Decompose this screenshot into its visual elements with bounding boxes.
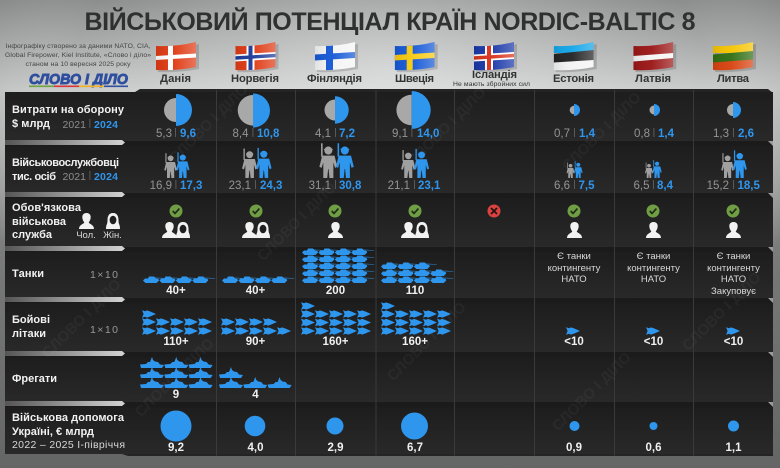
aid values: 6,7 — [407, 442, 423, 454]
row label: 2021 — [62, 119, 86, 131]
row label: 1×10 — [90, 269, 118, 281]
values: 2,6 — [738, 128, 754, 140]
row label — [12, 314, 118, 340]
country names: Латвія — [635, 73, 671, 85]
values: 23,1 — [229, 180, 251, 192]
watermarks — [39, 81, 765, 435]
tank notes: НАТО — [641, 274, 666, 285]
values: 0,7 — [554, 128, 570, 140]
watermarks: СЛОВО І ДІЛО — [549, 349, 635, 435]
aircraft values: 160+ — [323, 336, 349, 348]
country names: Швеція — [395, 73, 434, 85]
values: 8,4 — [232, 128, 249, 140]
values: 6,5 — [634, 180, 650, 192]
row: frigates — [12, 357, 292, 401]
values: 1,4 — [658, 128, 675, 140]
legend: men and women: Жін. — [103, 230, 122, 241]
row label: 2024 — [94, 171, 118, 183]
country names: Литва — [717, 73, 750, 85]
watermarks: СЛОВО І ДІЛО — [404, 84, 490, 170]
tank notes — [548, 251, 760, 297]
values: 9,6 — [180, 128, 196, 140]
row label: тис. осіб — [12, 171, 56, 183]
watermarks: СЛОВО І ДІЛО — [679, 269, 765, 355]
row: combat aircraft — [12, 302, 743, 348]
country names: Естонія — [553, 73, 594, 85]
row label: літаки — [12, 328, 46, 340]
values: 1,3 — [713, 128, 729, 140]
tank values: 200 — [326, 285, 345, 297]
values — [150, 180, 760, 192]
tank values — [166, 285, 424, 297]
row label: Фрегати — [12, 373, 57, 385]
row label: Обов'язкова — [12, 202, 82, 214]
row: tanks — [12, 248, 760, 297]
country names: Норвегія — [231, 73, 279, 85]
values: 4,1 — [315, 128, 331, 140]
row label: Військовослужбовці — [12, 157, 119, 169]
values: 5,3 — [156, 128, 172, 140]
values: 23,1 — [418, 180, 441, 192]
country names — [160, 69, 750, 88]
tank notes: Закуповує — [711, 286, 756, 297]
row label: 1×10 — [90, 324, 118, 336]
country names: Фінляндія — [307, 73, 362, 85]
tank notes: Є танки — [717, 251, 750, 262]
tank values: 110 — [406, 285, 424, 297]
row label: військова — [12, 216, 67, 228]
values: 10,8 — [257, 128, 280, 140]
aircraft values: 160+ — [402, 336, 428, 348]
source note: станом на 10 вересня 2025 року — [26, 61, 131, 68]
values: 6,6 — [554, 180, 570, 192]
values: 24,3 — [260, 180, 282, 192]
watermarks: СЛОВО І ДІЛО — [559, 89, 645, 175]
row label: $ млрд — [12, 118, 50, 130]
values: 14,0 — [417, 128, 439, 140]
row label: Бойові — [12, 314, 50, 326]
tank notes: Є танки — [637, 251, 670, 262]
flag: Latvia — [633, 41, 676, 72]
tank notes: контингенту — [548, 263, 601, 274]
flag: Denmark — [156, 41, 199, 72]
tank icons — [143, 248, 453, 283]
watermarks: СЛОВО І ДІЛО — [384, 299, 470, 385]
frigate values — [173, 389, 259, 401]
frigate values: 4 — [252, 389, 259, 401]
values — [156, 128, 754, 140]
row: conscription — [12, 202, 741, 241]
aircraft values: 110+ — [163, 336, 189, 348]
aid circles — [160, 410, 739, 442]
watermarks: СЛОВО І ДІЛО — [254, 179, 340, 265]
values: 1,4 — [579, 128, 596, 140]
row label: 2024 — [94, 119, 118, 131]
source note: Інфографіку створено за даними NATO, CIA, — [6, 42, 151, 50]
country names: Не мають збройних сил — [453, 80, 530, 88]
values: 15,2 — [707, 180, 729, 192]
frigate icons — [140, 357, 292, 388]
legend: men and women — [76, 213, 122, 241]
flag: Sweden — [395, 41, 438, 72]
row: personnel — [12, 143, 760, 192]
soldiers — [164, 143, 747, 178]
values: 30,8 — [339, 180, 362, 192]
tank notes: Є танки — [557, 251, 591, 262]
title: ВІЙСЬКОВИЙ ПОТЕНЦІАЛ КРАЇН NORDIC-BALTIC 8 — [84, 6, 696, 36]
row label: служба — [12, 229, 53, 241]
aircraft values — [163, 336, 743, 348]
tank notes: НАТО — [721, 274, 746, 285]
row label: 2022 – 2025 I-півріччя — [12, 439, 125, 451]
row label: Військова допомога — [12, 412, 125, 424]
row label — [12, 268, 118, 281]
conscription icons — [162, 204, 741, 238]
aircraft icons — [142, 302, 740, 335]
tank notes: контингенту — [707, 263, 760, 274]
values: 7,5 — [578, 180, 595, 192]
values: 18,5 — [738, 180, 760, 192]
country names: Ісландія — [472, 69, 517, 81]
frigate values: 9 — [173, 389, 179, 401]
values: 7,2 — [339, 128, 355, 140]
row label: Україні, € млрд — [12, 426, 94, 438]
aid values: 9,2 — [168, 442, 184, 454]
aircraft values: <10 — [644, 336, 663, 348]
aid values: 4,0 — [248, 442, 264, 454]
row: military aid — [12, 410, 742, 454]
row label: 2021 — [62, 171, 86, 183]
aid values — [168, 442, 742, 454]
values: 8,4 — [657, 180, 674, 192]
source note — [5, 42, 151, 68]
values: 31,1 — [309, 180, 331, 192]
tank values: 40+ — [166, 285, 186, 297]
aid values: 1,1 — [726, 442, 742, 454]
values: 21,1 — [388, 180, 410, 192]
watermarks: СЛОВО І ДІЛО — [39, 276, 125, 362]
flag: Estonia — [554, 41, 597, 72]
tank values: 40+ — [246, 285, 266, 297]
row label — [12, 412, 125, 451]
tank notes: контингенту — [627, 263, 680, 274]
flag: Iceland — [474, 41, 517, 72]
row label: Витрати на оборону — [12, 104, 125, 116]
watermarks: СЛОВО І ДІЛО — [132, 335, 218, 421]
source note: Global Firepower, Kiel Institute, «Слово і діло» — [5, 51, 151, 59]
logo: СЛОВО І ДІЛО — [29, 71, 128, 88]
aid values: 2,9 — [328, 442, 344, 454]
row label — [12, 157, 119, 183]
aircraft values: <10 — [724, 336, 743, 348]
flag: Finland — [315, 41, 358, 72]
values: 0,8 — [634, 128, 650, 140]
values: 16,9 — [150, 180, 172, 192]
half circles — [164, 91, 741, 129]
aid values: 0,6 — [646, 442, 662, 454]
aid values: 0,9 — [566, 442, 582, 454]
values: 9,1 — [392, 128, 408, 140]
aircraft values: 90+ — [246, 336, 266, 348]
watermarks: СЛОВО І ДІЛО — [166, 81, 252, 167]
flag: Norway — [236, 41, 278, 72]
country names: Данія — [160, 73, 191, 85]
row label — [12, 104, 125, 131]
data panel — [5, 89, 773, 456]
values: 17,3 — [180, 180, 202, 192]
flag: Lithuania — [713, 41, 756, 72]
legend: men and women: Чол. — [76, 230, 96, 241]
tank notes: НАТО — [561, 274, 587, 285]
row: defence spending — [12, 91, 754, 140]
flags row — [156, 41, 756, 72]
row label: Танки — [12, 268, 44, 280]
aircraft values: <10 — [564, 336, 584, 348]
row label — [12, 202, 82, 241]
